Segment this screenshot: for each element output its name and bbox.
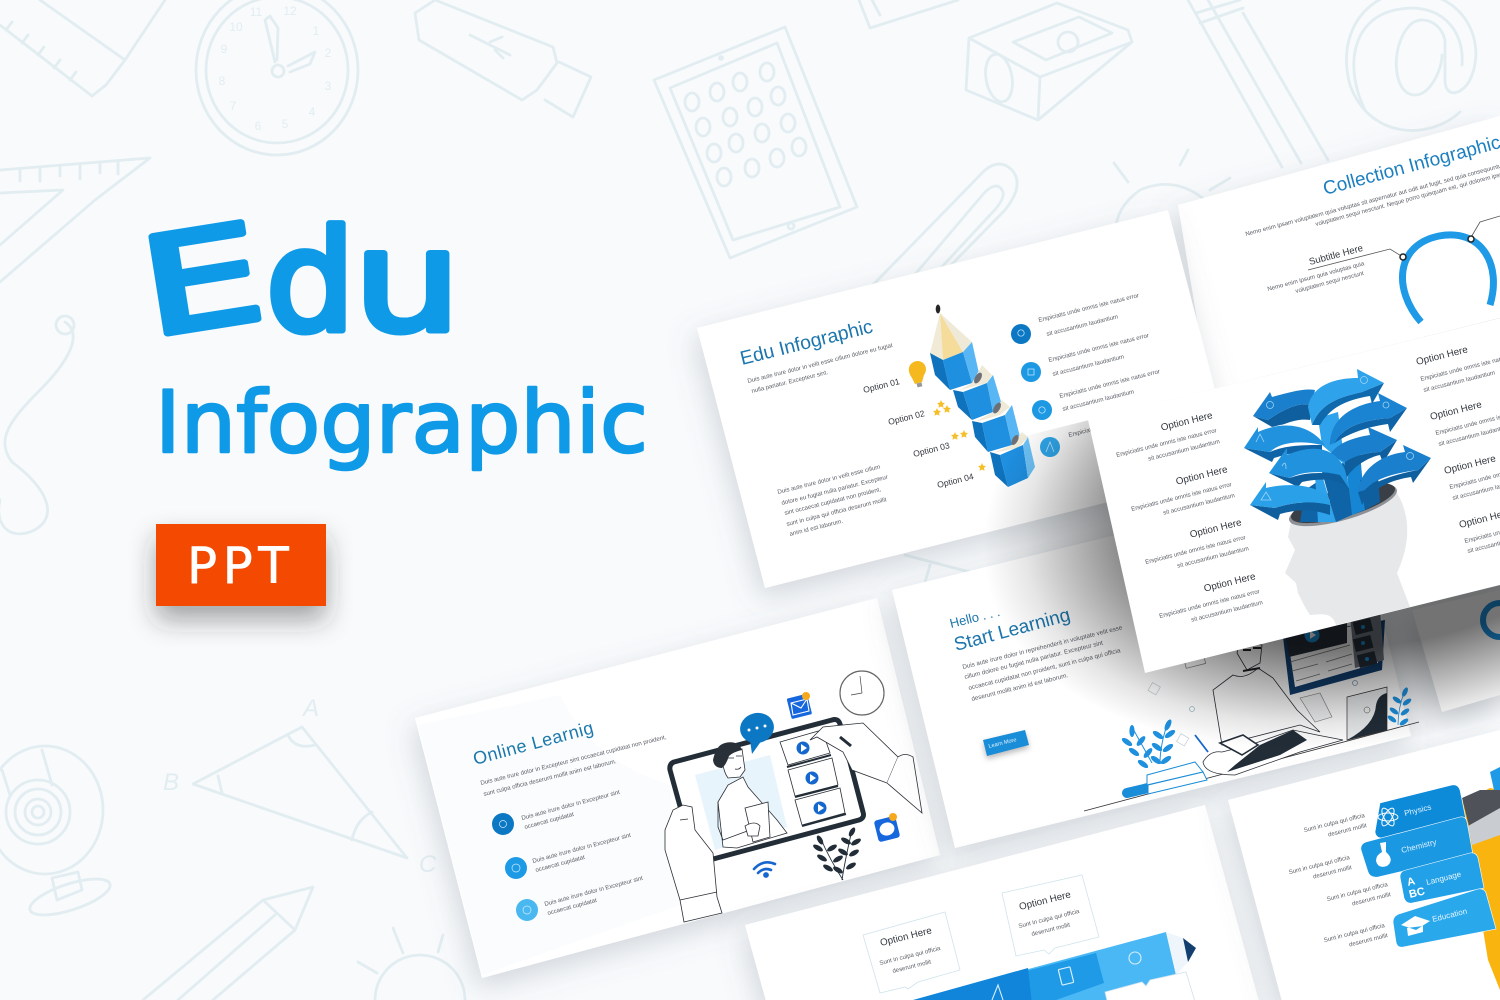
left option list: Erspiciatis unde omnis iste natus error xyxy=(1116,427,1217,459)
list text: sit accusantium laudantium xyxy=(1046,313,1119,338)
arrow: bottom left xyxy=(1250,482,1330,520)
left option list: Erspiciatis unde omnis iste natus error xyxy=(1145,534,1246,566)
badge: PPT xyxy=(156,524,326,606)
text block: paragraph xyxy=(777,464,889,538)
text block: paragraph: dolore eu fugiat nulla pariatur. Excepteur xyxy=(781,474,889,507)
subject descriptions: Sunt in culpa qui officia xyxy=(1326,881,1389,903)
text block: paragraph: anim id est laborum. xyxy=(789,518,844,538)
heading: edu infographic: Edu Infographic xyxy=(738,316,875,370)
pencil illustration xyxy=(1462,767,1500,990)
subtitle block: Nemo enim ipsum quia voluptas quia xyxy=(1267,260,1366,293)
arrow: left middle xyxy=(1244,426,1325,462)
doodle letters and clock numerals: C xyxy=(419,851,437,878)
callout: option box 2 xyxy=(1002,875,1099,956)
left option list: sit accusantium laudantium xyxy=(1147,438,1220,463)
icon: clock xyxy=(840,671,884,715)
subject tab: language: A xyxy=(1406,875,1416,889)
doodle letters and clock numerals: 1 xyxy=(313,24,320,38)
text block: paragraph: deserunt mollit anim id est laborum. xyxy=(971,672,1069,703)
illustration: student at desk xyxy=(1084,610,1419,811)
pencil illustration xyxy=(930,304,1035,487)
right option list: Option Here xyxy=(1429,399,1484,423)
subject tab: language: Language xyxy=(1425,869,1463,887)
subtitle block: voluptatem sequi nesciunt xyxy=(1295,270,1365,295)
doodle letters and clock numerals: B xyxy=(163,769,179,796)
left option list: Erspiciatis unde omnis iste natus error xyxy=(1131,481,1232,513)
arrow: left lower center xyxy=(1269,448,1350,490)
panel: subjects slide xyxy=(1228,730,1500,1000)
icon: mail xyxy=(787,692,812,719)
text block: intro: Nemo enim ipsam voluptatem quia voluptas sit aspernatur aut odit aut fugit, sed quia consequuntur xyxy=(1245,162,1500,238)
callout: option box 1: Sunt in culpa qui officia xyxy=(879,945,942,967)
option labels: Option 03 xyxy=(912,440,951,459)
left option list: Option Here xyxy=(1160,410,1214,434)
list text: Erspiciatis unde xyxy=(1068,422,1112,439)
list text: Erspiciatis unde omnis iste natus error xyxy=(1038,292,1140,324)
text block: intro: Duis aute irure dolor in velit esse cillum dolore eu fugiat xyxy=(747,342,894,385)
text block: paragraph xyxy=(962,624,1124,703)
chart: arc xyxy=(1400,235,1493,322)
left option list: Option Here xyxy=(1203,571,1257,595)
title: Infographic: Infographic xyxy=(155,373,648,473)
doodle letters and clock numerals: A xyxy=(301,695,319,722)
subject tab: chemistry: Chemistry xyxy=(1400,837,1437,855)
list text xyxy=(521,789,644,917)
panel: pencil timeline slide xyxy=(745,805,1260,1000)
left option list: sit accusantium laudantium xyxy=(1176,545,1249,570)
subject descriptions: deserunt mollit xyxy=(1327,822,1368,839)
list: icon bullets xyxy=(1011,324,1060,457)
option labels: Option 01 xyxy=(862,376,901,395)
panel: online learning slide xyxy=(415,598,940,978)
list text: Erspiciatis unde omnis iste natus error xyxy=(1059,368,1161,400)
doodle letters and clock numerals: 10 xyxy=(229,20,243,34)
panel: head with arrows slide xyxy=(1088,318,1500,673)
badge: PPT: PPT xyxy=(187,537,294,595)
text block: paragraph: Duis aute irure dolor in reprehenderit in voluptate velit esse xyxy=(962,624,1124,671)
left option list: sit accusantium laudantium xyxy=(1190,599,1263,624)
panel: start learning slide xyxy=(892,478,1419,848)
subject descriptions: deserunt mollit xyxy=(1348,932,1389,949)
button: learn more: Learn More xyxy=(988,737,1017,750)
doodle letters and clock numerals: 5 xyxy=(282,117,289,131)
right option list: Option Here xyxy=(1415,344,1470,368)
subject descriptions: deserunt mollit xyxy=(1312,864,1353,881)
callout: option box 1 xyxy=(863,912,960,993)
list text: occaecat cupidatat xyxy=(535,854,586,874)
doodle letters and clock numerals: 7 xyxy=(230,99,237,113)
shadow cast by head slide xyxy=(998,318,1500,741)
subject tab: language: BC xyxy=(1408,885,1426,901)
list text: sit accusantium laudantium xyxy=(1062,388,1135,413)
left option list: sit accusantium laudantium xyxy=(1162,492,1235,517)
illustration: tablet with video lesson xyxy=(665,720,922,922)
icon: light bulb xyxy=(909,361,926,387)
icon: chat xyxy=(874,813,900,842)
subject descriptions: Sunt in culpa qui officia xyxy=(1303,812,1366,834)
callout: option box 2: Sunt in culpa qui officia xyxy=(1018,908,1081,930)
text block: intro: nulla pariatur. Excepteur sint. xyxy=(751,369,829,395)
right option list: Option Here xyxy=(1443,453,1498,477)
doodle letters and clock numerals: 2 xyxy=(325,46,332,60)
icon: wifi xyxy=(754,862,775,877)
text block: paragraph: occaecat cupidatat non proident, sunt in culpa qui officia xyxy=(968,647,1122,692)
doodle letters and clock numerals: 11 xyxy=(250,5,263,19)
doodle letters and clock numerals: 6 xyxy=(255,119,262,133)
icon: stars xyxy=(933,400,986,471)
right option list: sit accusantium laudantium xyxy=(1423,369,1496,394)
icon: speech bubble xyxy=(737,709,777,754)
text block: paragraph: sint occaecat cupidatat non proident, xyxy=(784,486,882,517)
chart: ring xyxy=(1483,603,1500,637)
subject descriptions xyxy=(1288,812,1392,949)
subject tab: physics xyxy=(1375,785,1466,838)
heading: online learnig: Online Learnig xyxy=(471,717,596,769)
list text: sit accusantium laudantium xyxy=(1052,353,1125,378)
title: Edu xyxy=(130,194,460,367)
doodle letters and clock numerals: 4 xyxy=(309,105,316,119)
subject tab: language xyxy=(1400,853,1484,903)
text block: paragraph: sunt in culpa qui officia deserunt mollit xyxy=(786,496,888,528)
callout: option box 1: deserunt mollit xyxy=(892,958,932,975)
panel: edu infographic slide xyxy=(697,210,1236,588)
subtitle block: Subtitle Here xyxy=(1308,243,1364,268)
arrow: back left xyxy=(1253,389,1315,427)
title: Edu: u xyxy=(354,201,460,363)
left option list: Erspiciatis unde omnis iste natus error xyxy=(1159,588,1260,620)
doodle letters and clock numerals: 3 xyxy=(325,79,332,93)
illustration: head silhouette xyxy=(1285,475,1410,625)
callout: option box 3 xyxy=(1105,972,1196,1000)
right option list xyxy=(1415,344,1500,555)
doodle letters and clock numerals xyxy=(163,4,437,878)
subject descriptions: Sunt in culpa qui officia xyxy=(1288,854,1351,876)
left option list xyxy=(1116,410,1263,624)
option labels xyxy=(862,376,975,490)
arrow: top right xyxy=(1308,369,1384,425)
list text xyxy=(1038,292,1161,439)
option labels: Option 04 xyxy=(936,471,975,490)
subject tab: education: Education xyxy=(1431,907,1468,924)
list text: Erspiciatis unde omnis iste natus error xyxy=(1048,332,1150,364)
list text: occaecat cupidatat xyxy=(547,897,598,917)
callout: option box 2: Option Here xyxy=(1018,889,1073,913)
callout: option box 1: Option Here xyxy=(879,925,934,949)
panel: partial slide with ring xyxy=(1412,590,1500,712)
icon: plants xyxy=(812,826,862,880)
subject descriptions: deserunt mollit xyxy=(1351,891,1392,908)
doodle letters and clock numerals: 9 xyxy=(221,42,228,56)
text block: paragraph: cillum dolore eu fugiat nulla pariatur. Excepteur sint xyxy=(964,640,1104,681)
illustration: branching arrows xyxy=(1244,369,1431,522)
heading: collection infographic: Collection Infographic xyxy=(1321,132,1500,200)
arrow: center right xyxy=(1330,427,1397,480)
left option list: Option Here xyxy=(1175,464,1229,488)
title: Edu: d xyxy=(266,201,355,364)
left option list: Option Here xyxy=(1189,517,1243,541)
subtitle block xyxy=(1267,216,1500,295)
list text: Duis aute irure dolor in Excepteur sint xyxy=(544,875,644,908)
title: Edu: E xyxy=(130,194,274,367)
list text: Duis aute irure dolor in Excepteur sint xyxy=(521,789,621,822)
heading: start learning: Start Learning xyxy=(952,605,1073,656)
subject tab: education xyxy=(1393,889,1496,947)
arrow: upper right light xyxy=(1330,393,1407,445)
doodle letters and clock numerals: 12 xyxy=(283,4,297,18)
text block: intro: sunt culpa officia deserunt mollit anim est laborum. xyxy=(483,758,617,798)
option labels: Option 02 xyxy=(887,408,926,427)
text block: intro: Duis aute irure dolor in Excepteur sint occaecat cupidatat non proident, xyxy=(480,734,667,787)
arrow: lower right xyxy=(1358,445,1431,505)
list text: Duis aute irure dolor in Excepteur sint xyxy=(532,832,632,865)
heading: hello: Hello . . . xyxy=(948,604,1001,631)
list: three bullets xyxy=(492,813,538,921)
panel: collection infographic slide xyxy=(1178,116,1500,470)
subject tab: chemistry xyxy=(1361,817,1473,877)
button: learn more xyxy=(983,730,1029,756)
text block: paragraph: Duis aute irure dolor in velit esse cillum xyxy=(777,464,881,496)
doodle letters and clock numerals: 8 xyxy=(219,74,226,88)
callout: option box 2: deserunt mollit xyxy=(1031,921,1071,938)
subject descriptions: Sunt in culpa qui officia xyxy=(1323,922,1386,944)
pencil timeline bar xyxy=(895,932,1196,1000)
subject tab: physics: Physics xyxy=(1403,803,1432,818)
list text: occaecat cupidatat xyxy=(524,811,575,831)
